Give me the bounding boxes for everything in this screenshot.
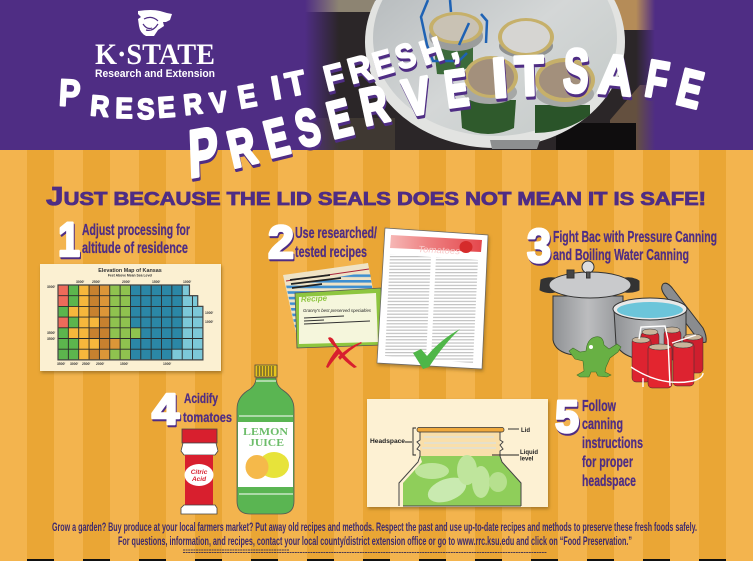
panel: elevation map of Kansas: Feet Above Mean Sea Level [108,274,152,278]
wire rack [631,326,703,387]
title line 2: Preserve it safe: E [441,59,472,119]
title line 2: Preserve it safe: A [596,43,636,109]
front green recipe card: Recipe [301,294,328,304]
map elevation labels [47,280,214,366]
title line 2: Preserve it safe: T [514,45,545,108]
jar: front centre [460,56,518,134]
map elevation labels: 3000' [47,285,56,289]
icon: red X [326,337,362,368]
front green recipe card: Granny's best preserved specialties [303,308,372,313]
title line 2: Preserve it safe: R [355,74,394,137]
title line 2: Preserve it safe: V [399,66,435,127]
panel: jar headspace diagram [367,399,548,507]
icon: lemon juice bottle: LEMON [243,426,288,438]
map elevation labels: 3500' [47,337,56,341]
title line 2: Preserve it safe: P [187,114,219,193]
logo: K-State Research and Extension [95,10,215,80]
map elevation labels: 1000' [183,280,192,284]
title line 1: Preserve it fresh,: , [442,28,463,67]
title line 1: Preserve it fresh,: P [58,72,82,115]
liquid level label: level [520,456,534,462]
title line 2: Preserve it safe: S [562,35,591,106]
back lined card [283,263,374,333]
jar: back left [429,12,483,74]
photo: pressure canner with jars [305,0,655,150]
lid label [508,428,530,434]
map elevation labels: 1500' [152,280,161,284]
icon: old recipe cards with red X [283,263,383,368]
title line 2: Preserve it safe: E [259,108,295,169]
fine print [183,550,547,552]
step 3 label: and Boiling Water Canning [553,247,689,264]
icon: boiling water canner [613,283,706,360]
map elevation labels: 3500' [57,362,66,366]
title line 1: Preserve it fresh,: I [268,69,284,107]
tilted lid [662,283,706,342]
liquid level label [492,450,538,462]
map elevation labels: 2500' [92,280,101,284]
footer text [52,520,697,548]
blue jar lifter [421,0,487,61]
title line 1: Preserve it fresh,: T [282,64,309,105]
map elevation labels: 1000' [205,320,214,324]
step 5 label: for proper [582,454,633,471]
title line 1: Preserve it fresh,: S [137,93,155,125]
heading: lid seal warning: JUST BECAUSE THE LID SEALS DOES NOT MEAN IT IS SAFE! [46,181,706,211]
logo: K-State Research and Extension: K·STATE [95,38,215,71]
step 5 label: canning [582,416,623,433]
step 2 label: tested recipes [295,244,367,261]
map elevation labels: 3000' [76,280,85,284]
step 2 number: 2 [268,216,294,268]
logo: K-State Research and Extension: Research and Extension [95,68,215,80]
icon: citric acid shaker: Acid [191,476,207,483]
icon: Fight Bac frog character [569,337,621,377]
icon: red jars in rack [631,326,703,388]
step 5 label: Follow [582,398,617,415]
map elevation labels: 1500' [120,362,129,366]
title line 1: Preserve it fresh,: F [320,56,349,100]
jar: back right [498,18,554,58]
step 1 number: 1 [58,214,80,267]
chart: county grid [58,285,203,360]
title line 1: Preserve it fresh,: R [344,47,377,92]
step 5 label: instructions [582,435,643,452]
step 5 label: headspace [582,473,636,490]
title line 2: Preserve it safe: S [290,98,326,159]
panel: elevation map of Kansas: Elevation Map of Kansas [98,268,162,274]
icon: tested recipe publication with green check: Tomatoes [418,244,461,256]
step 2 label: Use researched/ [295,225,377,242]
map elevation labels: 2000' [96,362,105,366]
map elevation labels: 1000' [205,311,214,315]
step 1 label: altitude of residence [82,240,188,257]
icon: tested recipe publication with green check [377,228,488,369]
liquid level label: Liquid [520,450,538,456]
icon: citric acid shaker [181,429,218,514]
title line 2: Preserve it safe: E [672,59,708,120]
map elevation labels: 2500' [82,362,91,366]
map elevation labels: 2000' [122,280,131,284]
icon: citric acid shaker: Citric [191,469,208,476]
step 5 label [582,398,643,490]
step 4 label: tomatoes [183,409,232,425]
title line 1: Preserve it fresh,: V [208,85,230,119]
icon: lemon juice bottle [237,365,294,514]
step 3 label [553,229,717,264]
step 4 label [183,390,232,425]
purple header band [0,0,753,150]
title line 2: Preserve it safe [187,35,708,193]
step 3 number: 3 [527,219,551,272]
title line 1: Preserve it fresh,: R [182,87,204,121]
map elevation labels: 3500' [47,331,56,335]
step 2 label [295,225,377,261]
icon: green check mark [413,329,460,369]
title line 2: Preserve it safe: F [641,50,673,110]
front green recipe card [295,288,383,348]
step 1 label: Adjust processing for [82,222,190,239]
step 5 number: 5 [555,391,579,442]
panel: elevation map of Kansas [40,264,221,371]
title line 2: Preserve it safe: I [490,46,510,110]
article text columns [385,254,478,363]
map elevation labels: 1000' [163,362,172,366]
icon: wildcat [138,10,172,36]
title line 1: Preserve it fresh,: E [235,78,259,116]
step 4 number: 4 [152,385,180,434]
step 1 label [82,222,190,257]
icon: pressure canner [540,261,639,355]
title line 1: Preserve it fresh, [58,28,463,125]
bottom black tick marks [27,559,726,561]
title line 1: Preserve it fresh,: E [368,41,397,84]
jar body with green contents [399,428,521,507]
icon: lemon juice bottle: JUICE [249,437,284,449]
title line 1: Preserve it fresh,: H [415,30,448,72]
title line 1: Preserve it fresh,: S [390,34,420,77]
jar lid [417,428,504,432]
title line 1: Preserve it fresh,: R [89,89,111,123]
title line 2: Preserve it safe: E [322,89,358,150]
lid label: Lid [521,428,530,434]
step 4 label: Acidify [184,390,218,406]
lemons [246,452,289,479]
jar: front right [535,58,595,133]
map elevation labels: 3000' [70,362,79,366]
title line 2: Preserve it safe: R [222,116,262,179]
title line 1: Preserve it fresh,: E [115,92,133,124]
headspace bracket and label: Headspace [370,439,406,445]
title line 1: Preserve it fresh,: E [156,90,176,124]
headspace bracket and label [370,428,416,455]
red publication header [390,235,482,252]
